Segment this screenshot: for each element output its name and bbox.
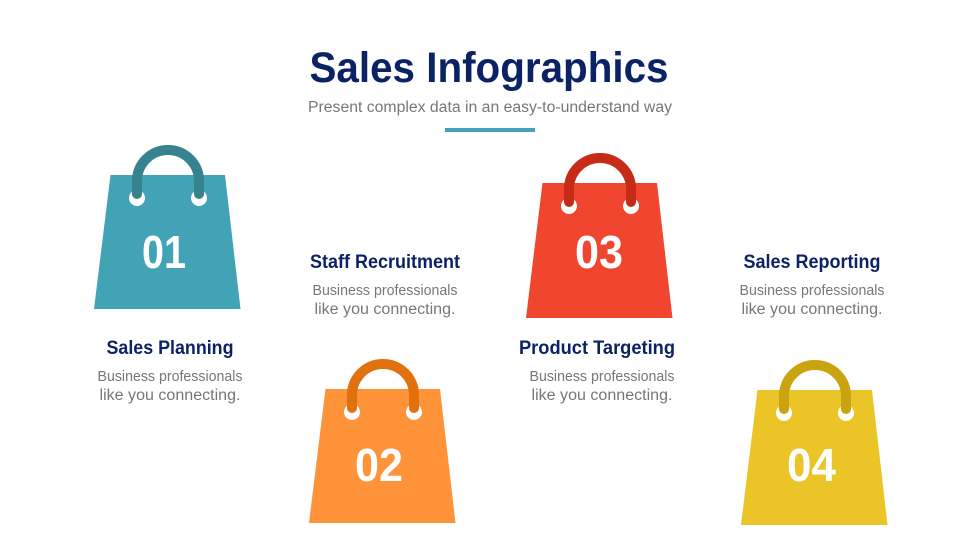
bag 04: yellow <box>741 365 888 525</box>
label: Sales Planning: Sales Planning <box>106 338 234 359</box>
bag 03: red <box>526 158 672 318</box>
label: Sales Reporting <box>740 252 884 318</box>
title: Sales Infographics <box>310 44 668 92</box>
label: Product Targeting: Business professionals <box>530 368 674 385</box>
label: Sales Reporting: Business professionals <box>740 282 884 299</box>
label: Sales Reporting: like you connecting. <box>742 301 882 318</box>
title underline <box>445 128 535 132</box>
label: Sales Planning: Business professionals <box>98 368 242 385</box>
label: Sales Planning <box>98 338 242 404</box>
bag 02: orange <box>309 364 456 523</box>
label: Product Targeting: like you connecting. <box>532 387 672 404</box>
label: Product Targeting <box>519 338 675 404</box>
label: Product Targeting: Product Targeting <box>519 338 675 359</box>
bag 01: teal: 01 <box>142 226 186 278</box>
bag 04: yellow: 04 <box>787 439 836 491</box>
label: Sales Planning: like you connecting. <box>100 387 240 404</box>
bag 01: teal <box>94 150 240 309</box>
subtitle: Present complex data in an easy-to-understand way <box>308 99 672 116</box>
label: Staff Recruitment: Business professionals <box>312 282 458 299</box>
label: Staff Recruitment: like you connecting. <box>314 301 456 318</box>
bag 03: red: 03 <box>575 226 623 278</box>
label: Staff Recruitment: Staff Recruitment <box>310 252 461 273</box>
label: Staff Recruitment <box>310 252 461 318</box>
bag 02: orange: 02 <box>355 439 403 491</box>
label: Sales Reporting: Sales Reporting <box>744 252 880 273</box>
